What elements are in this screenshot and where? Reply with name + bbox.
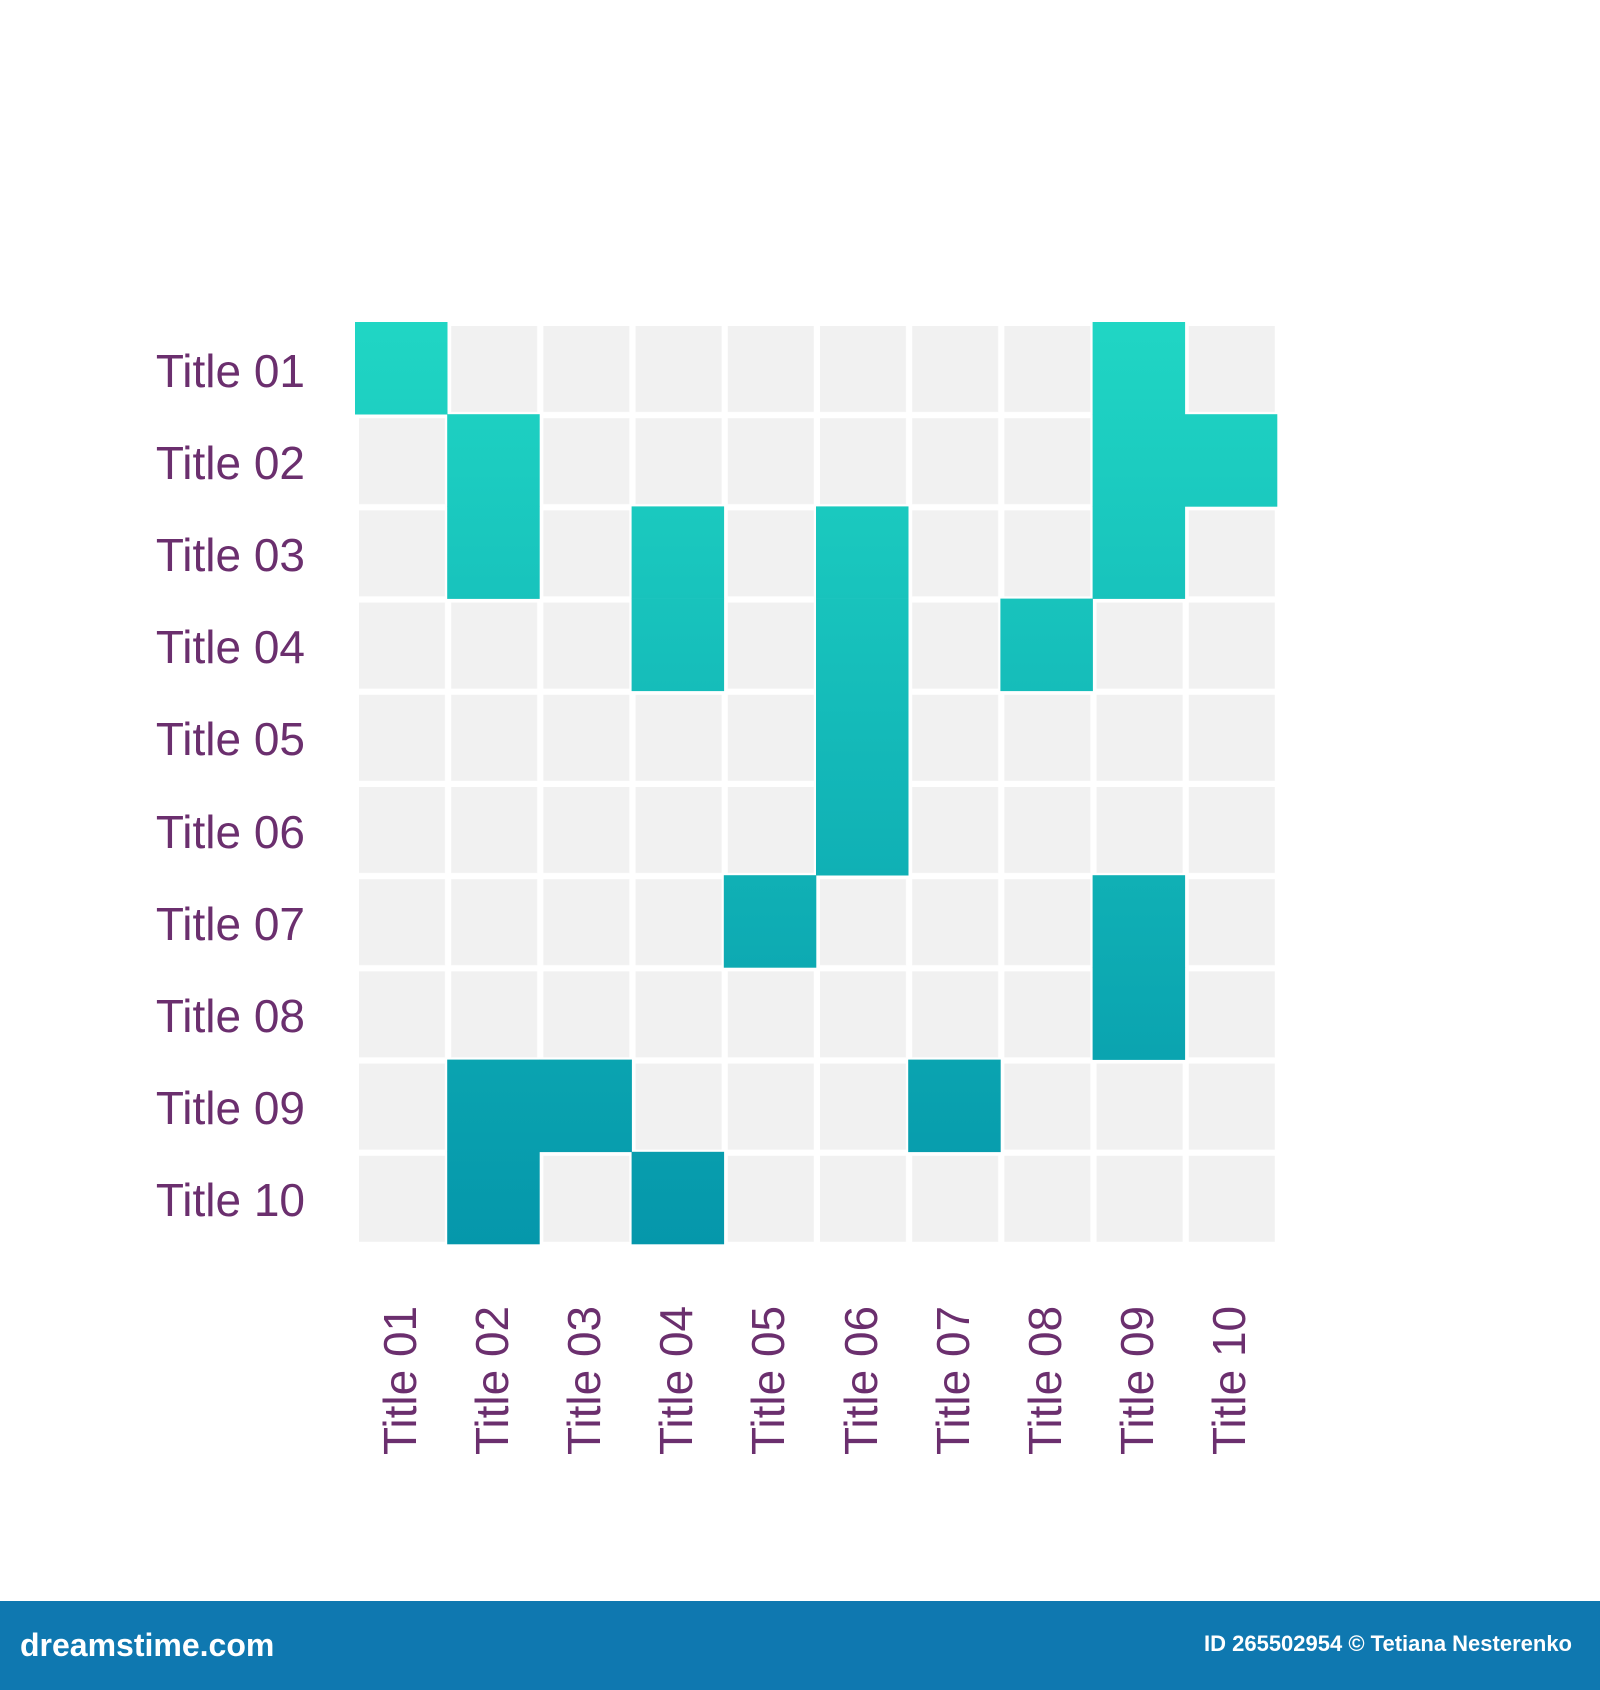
column labels: Title 05 [742,1306,794,1455]
footer logo text: dreamstime.com [20,1627,274,1663]
column labels: Title 03 [558,1306,610,1455]
row labels: Title 02 [156,437,305,489]
footer bar [0,1601,1600,1690]
row labels: Title 09 [156,1082,305,1134]
gray cells [355,322,1277,1244]
column labels: Title 08 [1019,1306,1071,1455]
heatmap grid [355,322,1278,1244]
row labels: Title 01 [156,345,305,397]
column labels: Title 01 [374,1306,426,1455]
row labels: Title 10 [156,1174,305,1226]
column labels: Title 07 [927,1306,979,1455]
footer credit: ID 265502954 © Tetiana Nesterenko [1204,1631,1572,1656]
row labels: Title 04 [156,621,305,673]
row labels: Title 08 [156,990,305,1042]
column labels [374,1306,1255,1455]
column labels: Title 10 [1203,1306,1255,1455]
column labels: Title 09 [1111,1306,1163,1455]
column labels: Title 04 [650,1306,702,1455]
row labels: Title 07 [156,898,305,950]
highlighted cells [355,322,1277,1244]
column labels: Title 06 [835,1306,887,1455]
row labels: Title 03 [156,529,305,581]
row labels [156,345,305,1226]
row labels: Title 05 [156,713,305,765]
row labels: Title 06 [156,806,305,858]
column labels: Title 02 [466,1306,518,1455]
